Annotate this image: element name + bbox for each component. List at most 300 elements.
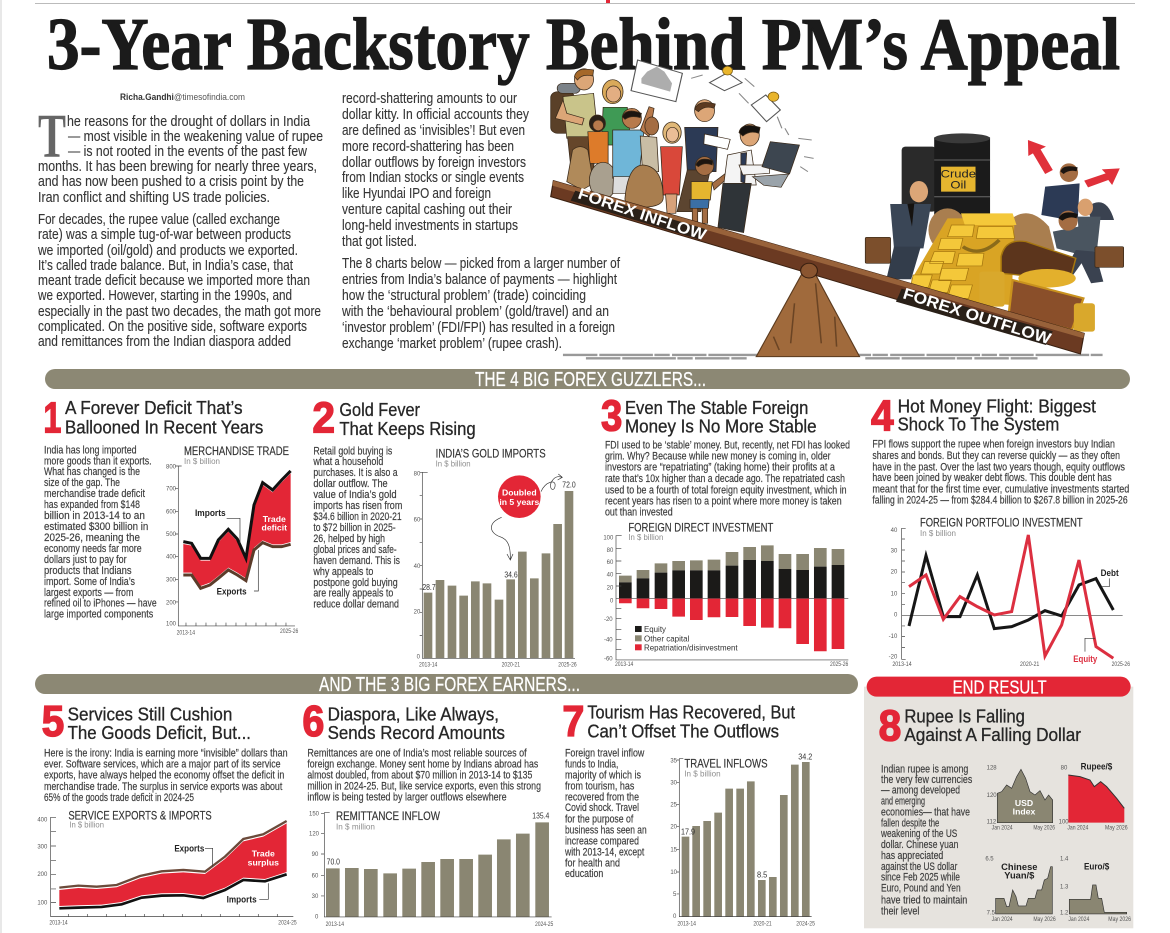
chart: rupee per dollar: May 2026 (1105, 826, 1128, 832)
text block 7 (564, 748, 647, 880)
chart: foreign direct investment: 20 (607, 585, 614, 591)
text block 2: what a household (312, 456, 383, 468)
chart: foreign portfolio investment: 10 (891, 591, 898, 597)
chart: gold imports: 0 (417, 655, 421, 661)
text block 3: out than invested (605, 506, 673, 518)
panel: chart 7 travel inflows (562, 698, 816, 927)
chart: euro per dollar: 1.4 (1060, 857, 1069, 863)
chart: chinese yuan per dollar: 6.5 (985, 857, 994, 863)
text block 6 (307, 748, 541, 804)
chart: foreign portfolio investment: 30 (891, 549, 898, 555)
chart: service exports and imports: 200 (37, 872, 48, 878)
chart: chinese yuan per dollar: 7.5 (987, 911, 996, 917)
drop cap: T (38, 103, 66, 171)
icon: crude oil label: Crude (941, 167, 976, 180)
text block 8 (880, 763, 972, 917)
heading 2: Gold Fever (339, 399, 420, 420)
chart: foreign direct investment: FOREIGN DIRECT INVESTMENT (628, 522, 773, 535)
heading 6 (328, 704, 505, 743)
heading 2: That Keeps Rising (339, 418, 476, 439)
text block 1: products that Indians (44, 565, 132, 577)
intro text column 2: record-shattering amounts to our (342, 90, 517, 107)
chart: gold imports: 2013-14 (419, 663, 438, 669)
chart: travel inflows: 35 (670, 759, 678, 765)
intro text column 2: ‘investor problem’ (FDI/FPI) has resulted in a foreign (342, 319, 615, 336)
text block 7: education (565, 868, 603, 880)
heading 6: Sends Record Amounts (328, 722, 505, 743)
chart: euro per dollar: 1.2 (1060, 911, 1069, 917)
chart: remittance inflow: 150 (309, 811, 320, 817)
panel: chart 1 merchandise trade (43, 395, 299, 637)
intro text column 2: more record-shattering has been (342, 138, 514, 155)
chart: chinese yuan per dollar: Chinese (1001, 862, 1037, 872)
heading 7 (587, 702, 795, 742)
number 5: 5 (42, 698, 64, 746)
chart: chinese yuan per dollar: May 2026 (1033, 917, 1056, 923)
intro text column 2: like Hyundai IPO and foreign (342, 185, 491, 202)
chart: travel inflows: 2020-21 (753, 921, 772, 927)
text block 7: Covid shock. Travel (565, 802, 639, 814)
text block 4: shares and bonds. But they can reverse quickly — as they often (872, 450, 1120, 462)
chart: remittance inflow: 135.4 (532, 811, 550, 821)
chart: rupee per dollar: Jan 2024 (1067, 826, 1089, 832)
text block 8: dollar. Chinese yuan (881, 839, 958, 851)
text block 2: dollar outflow. The (313, 478, 388, 490)
text block 3: grim. Why? Because while new money is coming in, older (605, 450, 831, 462)
chart: service exports and imports: surplus (248, 857, 279, 867)
heading 7: Tourism Has Recovered, But (587, 702, 795, 723)
text block 6: Remittances are one of India’s most reliable sources of (307, 748, 527, 760)
chart: service exports and imports: Trade (252, 849, 275, 859)
heading 1: Ballooned In Recent Years (65, 416, 263, 437)
byline: Richa.Gandhi@timesofindia.com (120, 92, 245, 103)
chart: foreign direct investment: -60 (604, 657, 613, 663)
chart: merchandise trade: 200 (166, 600, 177, 606)
chart: remittance inflow: 0 (315, 915, 319, 921)
heading 3 (625, 397, 817, 436)
text block 2: Retail gold buying is (313, 445, 392, 457)
text block 2: are really appeals to (313, 588, 393, 600)
chart: remittance inflow: 70.0 (327, 856, 340, 866)
text block 1: economy needs far more (44, 543, 142, 555)
chart: remittance inflow: In $ million (336, 822, 375, 831)
text block 4 (872, 439, 1129, 506)
illustration: people on the left (551, 69, 799, 233)
chart: travel inflows (670, 751, 816, 927)
text block 7: Foreign travel inflow (565, 748, 645, 760)
intro text column 1: — most visible in the weakening value of rupee (68, 128, 323, 145)
text block 7: majority of which is (565, 770, 641, 782)
chart: euro per dollar: Euro/$ (1084, 862, 1110, 872)
chart: foreign portfolio investment: 2013-14 (892, 662, 912, 668)
intro text column 2: are defined as ‘invisibles’! But even (342, 122, 525, 139)
illustration: placard and envelopes (631, 60, 814, 172)
chart: gold imports: 80 (414, 471, 421, 477)
text block 7: business has seen an (565, 824, 647, 836)
icon: crude oil label: Oil (950, 178, 966, 191)
chart: foreign direct investment: -20 (604, 617, 613, 623)
chart: service exports and imports: 2013-14 (49, 921, 68, 927)
chart: rupee per dollar: 80 (1061, 765, 1068, 771)
chart: merchandise trade (166, 445, 299, 637)
intro text column 1: Iran conflict and shifting US trade policies. (38, 189, 270, 206)
text block 7: for health and (565, 857, 620, 869)
text block 1: dollars just to pay for (44, 554, 127, 566)
text block 8: Indian rupee is among (881, 763, 968, 775)
text block 2: reduce dollar demand (313, 598, 399, 610)
text block 7: funds to India, (565, 758, 618, 770)
heading 4: Hot Money Flight: Biggest (898, 396, 1096, 417)
text block 8: — among developed (881, 785, 960, 797)
chart: USD index: 120 (987, 793, 997, 799)
intro text column 2: dollar kitty. In official accounts they (342, 106, 529, 123)
heading 1: A Forever Deficit That’s (65, 397, 243, 418)
text block 8: have tried to maintain (881, 894, 967, 906)
callout: doubled in 5 years (498, 475, 541, 518)
chart: travel inflows: 5 (673, 892, 677, 898)
text block 5: exports, have always helped the economy offset the deficit in (44, 770, 284, 782)
text block 2: why appeals to (312, 566, 373, 578)
chart: remittance inflow: 60 (312, 874, 319, 880)
text block 2: purchases. It is also a (313, 467, 398, 479)
intro text column 1: complicated. On the positive side, software exports (38, 318, 307, 335)
chart: foreign portfolio investment (889, 517, 1131, 668)
chart: USD index: Jan 2024 (992, 826, 1013, 832)
text block 7: recovered from the (565, 791, 639, 803)
chart: travel inflows: 15 (670, 847, 678, 853)
chart: foreign direct investment: 60 (607, 560, 614, 566)
text block 8: their level (881, 905, 919, 917)
chart: foreign direct investment: -40 (604, 637, 613, 643)
heading 8: Against A Falling Dollar (904, 724, 1081, 745)
chart: merchandise trade: 800 (166, 464, 177, 470)
intro text column 1: It’s called trade balance. But, in India’s case, that (38, 257, 294, 274)
text block 3: investors are “repatriating” (taking home) their profits at a (605, 462, 835, 474)
chart: chinese yuan per dollar: Yuan/$ (1004, 871, 1035, 881)
legend: Equity (644, 624, 667, 634)
chart: gold imports: 72.0 (562, 480, 576, 490)
chart: foreign direct investment: 2013-14 (615, 662, 634, 668)
intro text column 1: months. It has been brewing for nearly three years, (38, 158, 317, 175)
text block 1: import. Some of India’s (44, 576, 135, 588)
chart: merchandise trade: Imports (195, 508, 226, 518)
chart: foreign portfolio investment: Equity (1073, 654, 1098, 664)
chart: foreign portfolio investment: -10 (889, 634, 898, 640)
intro text column 1: he reasons for the drought of dollars in India (67, 113, 311, 130)
text block 5: Here is the irony: India is earning more “invisible” dollars than (44, 748, 288, 760)
heading 3: Even The Stable Foreign (625, 397, 808, 418)
chart: USD index (987, 765, 1056, 832)
chart: travel inflows: In $ billion (684, 770, 721, 779)
text block 8: Euro, Pound and Yen (881, 883, 961, 895)
heading 3: Money Is No More Stable (625, 415, 817, 436)
heading 1 (65, 397, 263, 437)
chart: merchandise trade: MERCHANDISE TRADE (184, 445, 289, 458)
chart: foreign portfolio investment: 40 (891, 528, 898, 534)
text block 8: weakening of the US (880, 828, 957, 840)
chart: service exports and imports (37, 809, 297, 927)
chart: merchandise trade: Trade (263, 514, 286, 524)
text block 1: has expanded from $148 (44, 499, 140, 511)
illustration: sacks, men and gold on the right (865, 163, 1124, 332)
banner: earners: AND THE 3 BIG FOREX EARNERS... (319, 674, 580, 696)
banner: guzzlers: THE 4 BIG FOREX GUZZLERS... (475, 369, 706, 391)
chart: merchandise trade: In $ billion (184, 457, 220, 466)
chart: foreign direct investment: 2025-26 (830, 662, 849, 668)
chart: merchandise trade: Exports (217, 586, 247, 596)
chart: euro per dollar: 1.3 (1060, 885, 1069, 891)
chart: gold imports: 40 (414, 564, 421, 570)
icon: crude oil label (941, 167, 976, 192)
chart: gold imports: 28.7 (422, 582, 436, 592)
intro text column 1: For decades, the rupee value (called exchange (38, 211, 280, 228)
arrow: to 72.0 (541, 474, 562, 492)
text block 3: used to be a fourth of total foreign equity investment, which in (605, 484, 847, 496)
intro text column 2: dollar outflows by foreign investors (342, 154, 526, 171)
intro text column 1: rate) was a simple tug-of-war between products (38, 226, 291, 243)
text block 5: merchandise trade. The surplus in service exports was about (44, 781, 282, 793)
intro text column 1: — is not rooted in the events of the past few (68, 143, 307, 160)
text block 1: largest exports — from (44, 587, 133, 599)
text block 2 (312, 445, 402, 610)
chart: remittance inflow: 30 (312, 894, 319, 900)
intro text column 2 (341, 90, 621, 352)
chart: rupee per dollar: 100 (1059, 820, 1069, 826)
chart: travel inflows: 17.9 (681, 827, 695, 837)
chart: foreign direct investment: 0 (610, 599, 614, 605)
intro text column 1: meant trade deficit because we imported more than (38, 272, 310, 289)
chart: travel inflows: 2013-14 (677, 921, 697, 927)
chart: travel inflows: 8.5 (757, 870, 768, 880)
chart: service exports and imports: 2024-25 (278, 921, 297, 927)
chart: travel inflows: 20 (670, 825, 678, 831)
chart: remittance inflow: 90 (312, 852, 319, 858)
text block 5 (44, 748, 288, 804)
text block 6: million in 2024-25. But, like service exports, even this strong (307, 781, 541, 793)
chart: service exports and imports: Exports (174, 844, 204, 854)
heading 8 (904, 706, 1081, 745)
text block 8: the very few currencies (881, 774, 972, 786)
text block 1: large imported components (44, 609, 153, 621)
text block 7: for the purpose of (565, 813, 633, 825)
chart: travel inflows: 10 (670, 870, 678, 876)
intro text column 1 (37, 103, 323, 350)
text block 6: foreign exchange. Money sent home by Indians abroad has (307, 759, 538, 771)
illustration: oil barrels (902, 133, 990, 217)
chart: euro per dollar (1060, 857, 1132, 923)
illustration: ground shadow (563, 355, 1103, 358)
chart: gold imports: 60 (414, 517, 421, 523)
text block 8: fallen despite the (881, 817, 939, 829)
callout: doubled in 5 years: Doubled (502, 487, 537, 497)
text block 8: has appreciated (881, 850, 943, 862)
text block 1: What has changed is the (44, 466, 140, 478)
chart: travel inflows: TRAVEL INFLOWS (684, 757, 768, 770)
text block 4: FPI flows support the rupee when foreign investors buy Indian (872, 439, 1115, 451)
chart: service exports and imports: SERVICE EXPORTS & IMPORTS (68, 809, 212, 822)
text block 8: economies— that have (881, 807, 970, 819)
number 7: 7 (562, 698, 584, 746)
chart: USD index: 128 (987, 765, 997, 771)
text block 2: imports has risen from (313, 500, 402, 512)
chart: merchandise trade: 400 (166, 555, 177, 561)
legend: Other capital (644, 633, 689, 643)
text block 1 (44, 444, 157, 621)
label: forex outflow: FOREX OUTFLOW (901, 286, 1054, 348)
banner: earners (35, 674, 858, 696)
chart: foreign portfolio investment: -20 (889, 655, 898, 661)
chart: remittance inflow: 2024-25 (535, 922, 554, 928)
panel: chart 5 service exports (37, 698, 297, 927)
chart: travel inflows: 30 (670, 781, 678, 787)
chart: gold imports: 2020-21 (502, 663, 521, 669)
heading 4: Shock To The System (898, 414, 1059, 435)
chart: remittance inflow: 2013-14 (326, 922, 345, 928)
chart: remittance inflow: REMITTANCE INFLOW (336, 810, 440, 823)
intro text column 2: exchange ‘market problem’ (rupee crash). (342, 335, 562, 352)
intro text column 1: and has now been pushed to a crisis point by the (38, 173, 304, 190)
chart: service exports and imports: 400 (37, 817, 48, 823)
chart: travel inflows: 34.2 (798, 751, 813, 761)
chart: foreign portfolio investment: In $ billion (920, 529, 956, 538)
text block 2: global prices and safe- (313, 544, 397, 556)
illustration: seesaw plank (551, 181, 1084, 354)
icon: red arrows (1028, 140, 1120, 187)
text block 3 (605, 439, 850, 518)
chart: USD index: 112 (987, 820, 997, 826)
chart: euro per dollar: Jan 2024 (1068, 917, 1090, 923)
intro text column 2: long-held investments in startups (342, 217, 518, 234)
text block 4: have in the past. Over the last two years though, equity outflows (872, 461, 1125, 473)
text block 1: merchandise trade deficit (44, 488, 145, 500)
heading 5: Services Still Cushion (68, 704, 232, 725)
heading 4 (898, 396, 1096, 435)
panel: chart 6 remittance inflow (302, 698, 554, 928)
intro text column 1: we imported (oil/gold) and products we exported. (37, 242, 298, 259)
chart: euro per dollar: May 2026 (1108, 917, 1132, 923)
intro text column 1: and remittances from the Indian diaspora added (38, 333, 291, 350)
chart: foreign direct investment: 100 (603, 536, 614, 542)
panel: end result (864, 676, 1133, 928)
chart: rupee per dollar (1059, 762, 1128, 832)
chart: merchandise trade: deficit (262, 522, 287, 532)
intro text column 2: from Indian stocks or single events (342, 169, 524, 186)
intro text column 2: with the ‘behavioural problem’ (gold/travel) and an (341, 303, 609, 320)
chart: foreign portfolio investment: 2020-21 (1020, 662, 1040, 668)
panel: chart 4 foreign portfolio investment (871, 393, 1131, 668)
label: forex inflow: FOREX INFLOW (576, 186, 709, 245)
heading 5: The Goods Deficit, But... (68, 722, 251, 743)
chart: chinese yuan per dollar (985, 857, 1056, 923)
text block 2: 26, helped by high (313, 533, 385, 545)
chart: foreign portfolio investment: FOREIGN PORTFOLIO INVESTMENT (920, 517, 1083, 530)
text block 8: and emerging (881, 795, 925, 807)
heading 7: Can’t Offset The Outflows (587, 721, 779, 742)
text block 2: value of India’s gold (313, 489, 397, 501)
text block 2: to $72 billion in 2025- (313, 522, 396, 534)
chart: travel inflows: 2024-25 (796, 921, 816, 927)
number 6: 6 (302, 698, 324, 746)
chart: service exports and imports: In $ billion (69, 821, 104, 830)
chart: merchandise trade: 700 (166, 487, 177, 493)
number 2: 2 (312, 395, 335, 443)
text block 5: ever. Software services, which are a major part of its service (44, 759, 281, 771)
text block 1: billion in 2013-14 to an (44, 510, 145, 522)
chart: service exports and imports: 300 (37, 845, 48, 851)
chart: foreign portfolio investment: 20 (891, 570, 898, 576)
chart: service exports and imports: 100 (37, 900, 48, 906)
chart: merchandise trade: 300 (166, 577, 177, 583)
text block 1: size of the gap. The (44, 477, 120, 489)
chart: foreign portfolio investment: 0 (894, 612, 898, 618)
chart: rupee per dollar: Rupee/$ (1081, 762, 1113, 772)
chart: gold imports (414, 448, 577, 669)
text block 2: haven demand. This is (313, 555, 400, 567)
text block 1: India has long imported (44, 444, 137, 456)
panel: chart 2 gold imports (312, 395, 577, 669)
chart: chinese yuan per dollar: Jan 2024 (992, 917, 1013, 923)
intro text column 2: how the ‘structural problem’ (trade) coinciding (342, 287, 586, 304)
panel: chart 3 foreign direct investment (601, 393, 850, 668)
chart: foreign direct investment: 80 (607, 548, 614, 554)
text block 8: against the US dollar (881, 861, 958, 873)
text block 6: inflow is being tested by larger outflows elsewhere (307, 792, 507, 804)
number 4: 4 (871, 393, 894, 441)
chart: merchandise trade: 2025-26 (280, 629, 299, 635)
text block 5: 65% of the goods trade deficit in 2024-25 (44, 792, 194, 804)
chart: foreign direct investment: 40 (607, 572, 614, 578)
callout: doubled in 5 years: in 5 years (499, 497, 539, 507)
text block 1: more goods than it exports. (44, 456, 152, 468)
arrow: to 34.6 (491, 517, 513, 560)
chart: merchandise trade: 2013-14 (177, 631, 196, 637)
heading 2 (339, 399, 476, 439)
legend: Repatriation/disinvestment (644, 643, 738, 653)
text block 6: almost doubled, from about $70 million in 2013-14 to $135 (307, 770, 532, 782)
intro text column 1: especially in the past two decades, the math got more (38, 303, 321, 320)
banner: end result (867, 676, 1131, 697)
text block 8: since Feb 2025 while (881, 872, 960, 884)
chart: travel inflows: 25 (670, 802, 678, 808)
text block 1: estimated $300 billion in (44, 521, 148, 533)
text block 7: from tourism, has (565, 780, 634, 792)
heading 8: Rupee Is Falling (904, 706, 1025, 727)
number 1: 1 (43, 395, 61, 443)
chart: foreign direct investment (603, 522, 849, 668)
illustration: seesaw fulcrum (756, 262, 860, 357)
chart: gold imports: 2025-26 (558, 663, 577, 669)
chart: USD index: May 2026 (1033, 826, 1056, 832)
text block 4: meant that for the first time ever, cumulative investments started (872, 483, 1129, 495)
chart: merchandise trade: 600 (166, 509, 177, 515)
chart: USD index: Index (1013, 806, 1035, 816)
number 8: 8 (879, 703, 901, 751)
intro text column 2: that got listed. (342, 233, 417, 250)
text block 2: postpone gold buying (313, 577, 398, 589)
text block 1: 2025-26, meaning the (44, 532, 140, 544)
heading 5 (68, 704, 251, 743)
text block 3: FDI used to be ‘stable’ money. But, recently, net FDI has looked (605, 439, 850, 451)
text block 1: refined oil to iPhones — have (44, 598, 157, 610)
illustration: forex seesaw (551, 60, 1124, 358)
chart: merchandise trade: 500 (166, 532, 177, 538)
text block 3: recent years has risen to a point where more money is taken (605, 495, 842, 507)
legend (635, 624, 738, 653)
chart: service exports and imports: Imports (227, 895, 257, 905)
text block 2: $34.6 billion in 2020-21 (313, 511, 402, 523)
intro text column 2: venture capital cashing out their (342, 201, 512, 218)
chart: gold imports: 20 (414, 610, 421, 616)
